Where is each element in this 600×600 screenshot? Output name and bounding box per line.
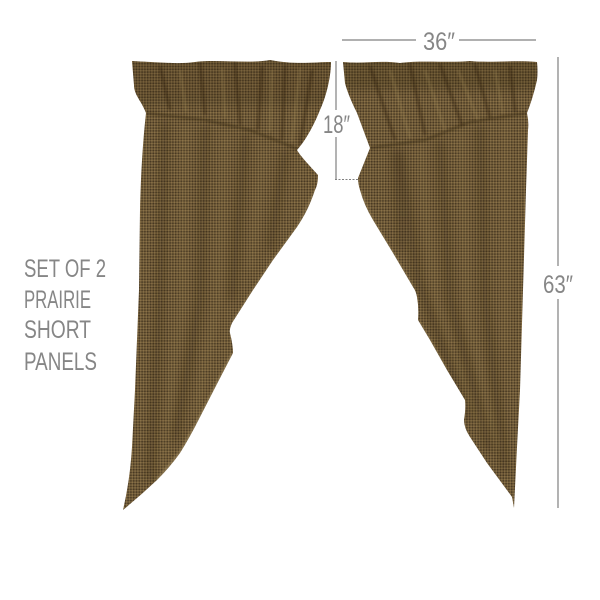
product label text: PANELS xyxy=(24,348,97,376)
left curtain panel xyxy=(120,55,340,510)
product label text: PRAIRIE xyxy=(24,286,91,314)
dimension: width 36 inches: 36″ xyxy=(423,28,455,56)
product label text: SHORT xyxy=(24,316,91,344)
dimension: length to tieback 18 inches: 18″ xyxy=(323,111,350,139)
right curtain panel xyxy=(340,58,540,508)
product label text xyxy=(24,255,106,376)
dimension: total length 63 inches: 63″ xyxy=(543,271,573,299)
dimension: length to tieback 18 inches xyxy=(323,61,358,180)
infographic: prairie curtain panels with dimensions xyxy=(24,32,573,510)
product label text: SET OF 2 xyxy=(24,255,106,283)
